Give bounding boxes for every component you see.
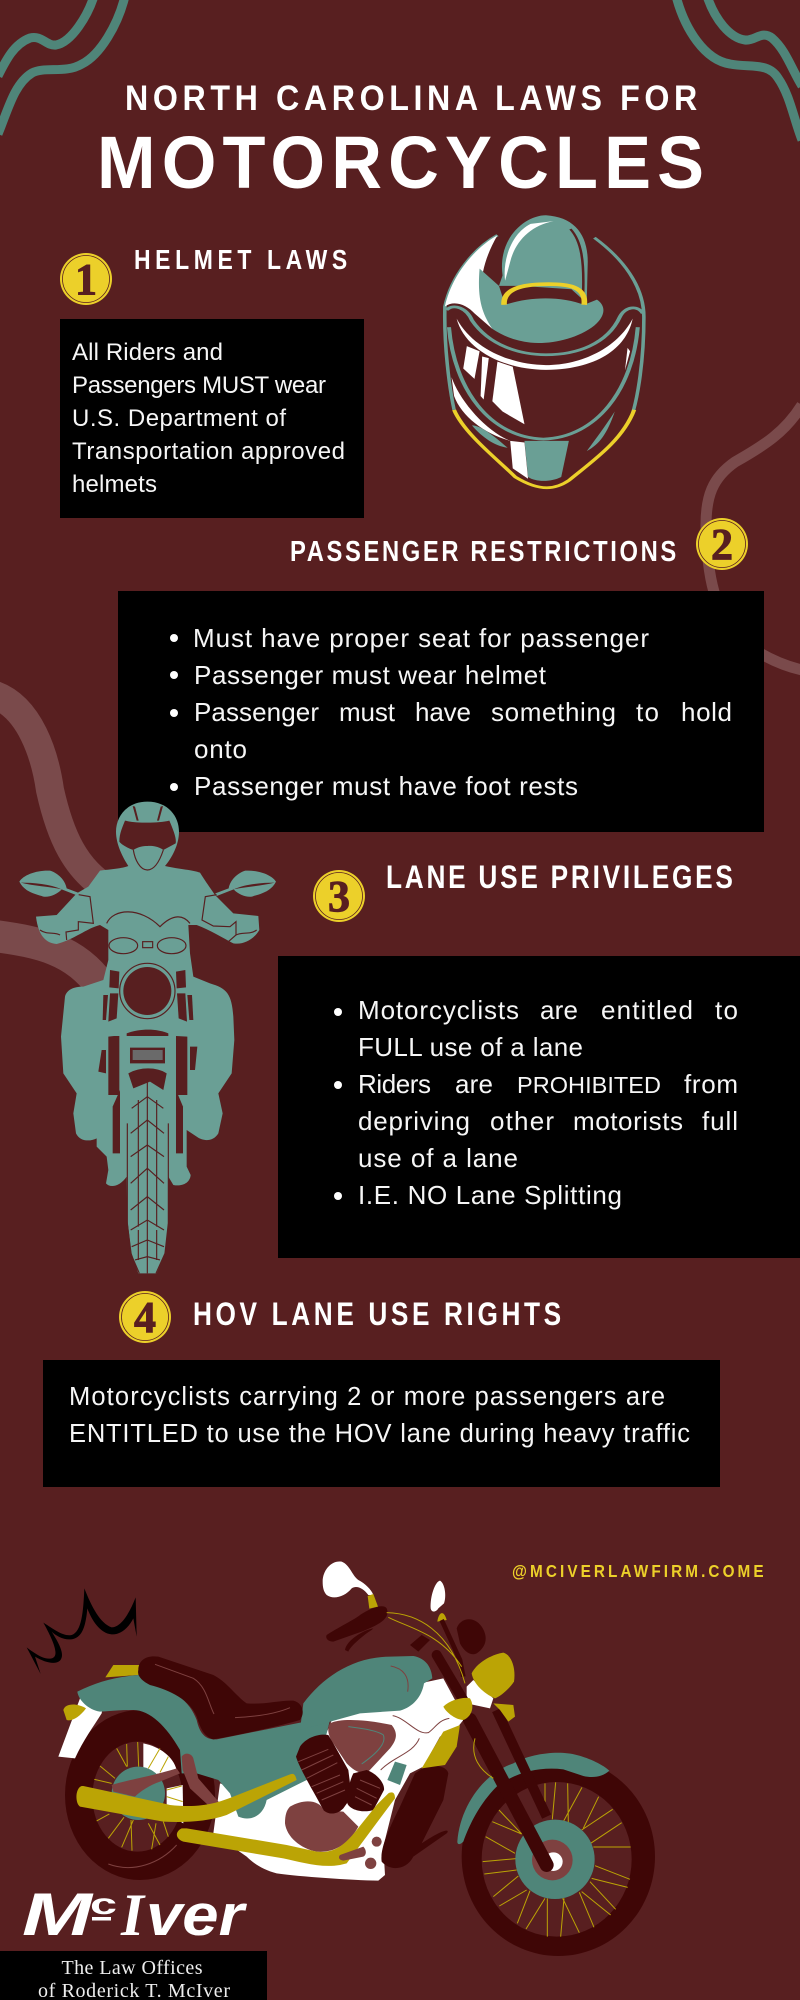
footer: law offices: The Law Offices <box>62 1957 203 1979</box>
panel: lane use privileges: full <box>702 1106 738 1136</box>
panel: passenger restrictions: something <box>491 697 616 727</box>
title: MOTORCYCLES <box>97 122 704 204</box>
decorative teal curves top right <box>676 0 800 140</box>
rider and bike silhouette <box>36 802 259 1273</box>
panel: lane use privileges: are <box>455 1069 493 1099</box>
panel: lane use privileges: to <box>715 995 738 1025</box>
right mirror <box>215 871 276 897</box>
panel: lane use privileges: other <box>490 1106 554 1136</box>
panel: lane use privileges: depriving <box>358 1106 470 1136</box>
linework and dark details <box>21 806 275 1153</box>
section 2 badge: 2 <box>711 520 733 569</box>
front wheel <box>462 1757 655 1956</box>
rear wheel <box>65 1710 215 1880</box>
section 1 badge: 1 <box>75 255 97 304</box>
logo: McIver <box>22 1881 248 1948</box>
title: NORTH CAROLINA LAWS FOR <box>125 80 697 118</box>
left mirror <box>19 871 80 897</box>
panel: lane use privileges: PROHIBITED <box>517 1072 661 1098</box>
panel: helmet laws: U.S. Department of <box>72 405 286 432</box>
panel: HOV lane use rights: ENTITLED to use the HOV lane during heavy traffic <box>69 1420 690 1448</box>
panel: passenger restrictions: Passenger must wear helmet <box>194 660 547 690</box>
panel: helmet laws <box>60 319 364 518</box>
icon: crown squiggle <box>27 1588 137 1674</box>
section 4 badge: 4 <box>134 1293 156 1342</box>
panel: passenger restrictions: onto <box>194 734 247 764</box>
section 2 heading: PASSENGER RESTRICTIONS <box>290 535 676 568</box>
section 2 badge <box>696 518 748 570</box>
section 3 heading: LANE USE PRIVILEGES <box>386 861 733 896</box>
panel: helmet laws: Transportation approved <box>72 438 345 465</box>
panel: lane use privileges: motorists <box>573 1106 683 1136</box>
panel: passenger restrictions <box>118 591 764 832</box>
rear fender and lights <box>58 1665 140 1758</box>
seat <box>138 1656 303 1739</box>
panel: helmet laws: All Riders and <box>72 339 223 366</box>
icon: helmet <box>445 215 644 488</box>
panel: lane use privileges: Riders <box>358 1069 431 1099</box>
section 1 badge <box>60 253 112 305</box>
logo: McIver: I <box>120 1882 147 1948</box>
panel: passenger restrictions: to <box>636 697 659 727</box>
panel: HOV lane use rights <box>43 1360 720 1487</box>
bodywork <box>77 1656 432 1819</box>
logo: McIver: M <box>22 1881 95 1948</box>
section 3 badge: 3 <box>328 872 350 921</box>
panel: passenger restrictions: Passenger must have foot rests <box>194 771 578 801</box>
section 4 badge <box>119 1291 171 1343</box>
panel: passenger restrictions: Must have proper seat for passenger <box>193 623 649 653</box>
panel: passenger restrictions: have <box>415 697 471 727</box>
panel: lane use privileges: FULL use of a lane <box>358 1032 583 1062</box>
decorative teal curves top left <box>0 0 125 134</box>
section 4 heading: HOV LANE USE RIGHTS <box>193 1298 561 1333</box>
panel: lane use privileges: entitled <box>601 995 693 1025</box>
section 3 badge <box>313 870 365 922</box>
front assembly <box>323 1561 609 1868</box>
panel: lane use privileges: use of a lane <box>358 1143 518 1173</box>
panel: lane use privileges: Motorcyclists <box>358 995 519 1025</box>
title <box>97 80 704 204</box>
section 1 heading: HELMET LAWS <box>134 245 347 276</box>
icon: rider on motorcycle front view <box>19 802 276 1273</box>
panel: lane use privileges <box>278 956 800 1258</box>
panel: HOV lane use rights: Motorcyclists carrying 2 or more passengers are <box>69 1383 665 1411</box>
website address: @MCIVERLAWFIRM.COME <box>512 1561 764 1581</box>
illustration: motorcycle <box>58 1561 655 1956</box>
panel: lane use privileges: are <box>540 995 578 1025</box>
exhaust pipes <box>76 1754 395 1866</box>
white frame <box>213 1678 463 1881</box>
logo: McIver: ver <box>146 1883 248 1948</box>
pale swoosh right <box>706 405 800 670</box>
footer: law offices <box>0 1951 267 2000</box>
pale swoosh left <box>0 695 110 985</box>
panel: lane use privileges: I.E. NO Lane Splitting <box>358 1180 622 1210</box>
panel: helmet laws: helmets <box>72 471 157 498</box>
panel: lane use privileges: from <box>684 1069 738 1099</box>
panel: passenger restrictions: must <box>339 697 396 727</box>
engine <box>285 1720 396 1869</box>
panel: passenger restrictions: hold <box>681 697 732 727</box>
panel: passenger restrictions: Passenger <box>194 697 319 727</box>
panel: helmet laws: Passengers MUST wear <box>72 372 326 399</box>
logo: McIver: c <box>90 1888 117 1921</box>
